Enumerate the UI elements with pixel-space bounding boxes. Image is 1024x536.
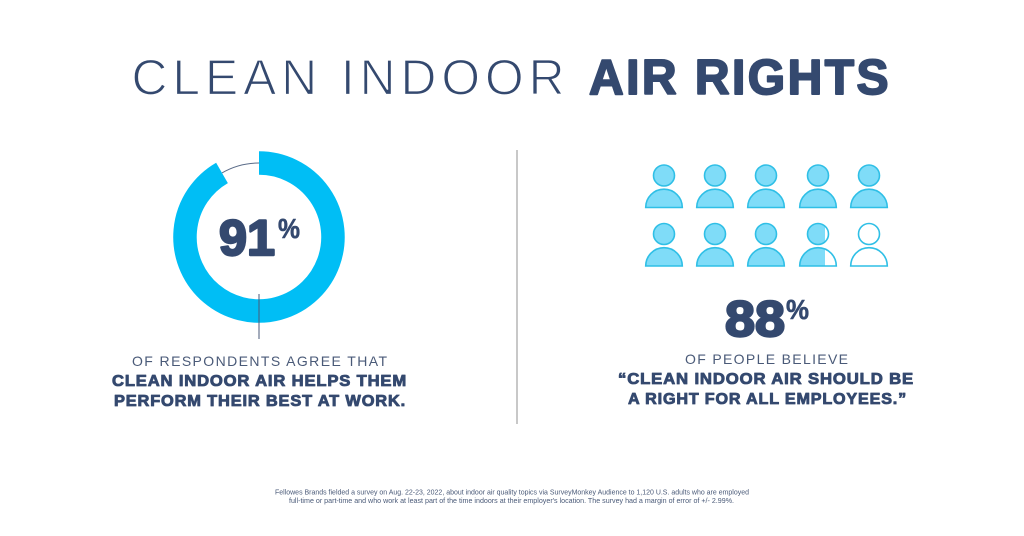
footnote: Fellowes Brands fielded a survey on Aug. 22-23, 2022, about indoor air quality topics via SurveyMonkey Audience to 1,120 U.S. adults who are employed bbox=[275, 488, 749, 496]
value: 91%: % bbox=[278, 213, 300, 244]
footnote: full-time or part-time and who work at least part of the time indoors at their employer's location. The survey had a margin of error of +/- 2.99%. bbox=[289, 496, 734, 505]
divider bbox=[516, 150, 518, 424]
text: people caption: A RIGHT FOR ALL EMPLOYEES.” bbox=[628, 391, 907, 408]
text: respondents caption: OF RESPONDENTS AGREE THAT bbox=[132, 353, 387, 369]
title: AIR RIGHTS bbox=[589, 51, 891, 105]
pictogram: ten people bbox=[646, 165, 887, 266]
text: respondents caption bbox=[112, 353, 407, 410]
text: people caption: OF PEOPLE BELIEVE bbox=[685, 351, 848, 367]
panel: 91 percent statistic bbox=[112, 163, 407, 410]
donut chart bbox=[185, 163, 333, 339]
title: CLEAN INDOOR bbox=[132, 50, 570, 106]
text: respondents caption: CLEAN INDOOR AIR HELPS THEM bbox=[112, 373, 407, 390]
title bbox=[132, 50, 891, 106]
value: 91%: 91 bbox=[219, 210, 275, 266]
panel: 88 percent statistic bbox=[618, 165, 914, 408]
value: 88% bbox=[725, 291, 809, 347]
value: 88%: % bbox=[786, 294, 809, 325]
text: people caption: “CLEAN INDOOR AIR SHOULD BE bbox=[618, 371, 914, 388]
text: respondents caption: PERFORM THEIR BEST AT WORK. bbox=[114, 393, 406, 410]
footnote bbox=[275, 488, 749, 505]
value: 88%: 88 bbox=[725, 291, 785, 347]
text: people caption bbox=[618, 351, 914, 408]
value: 91% bbox=[219, 210, 300, 266]
